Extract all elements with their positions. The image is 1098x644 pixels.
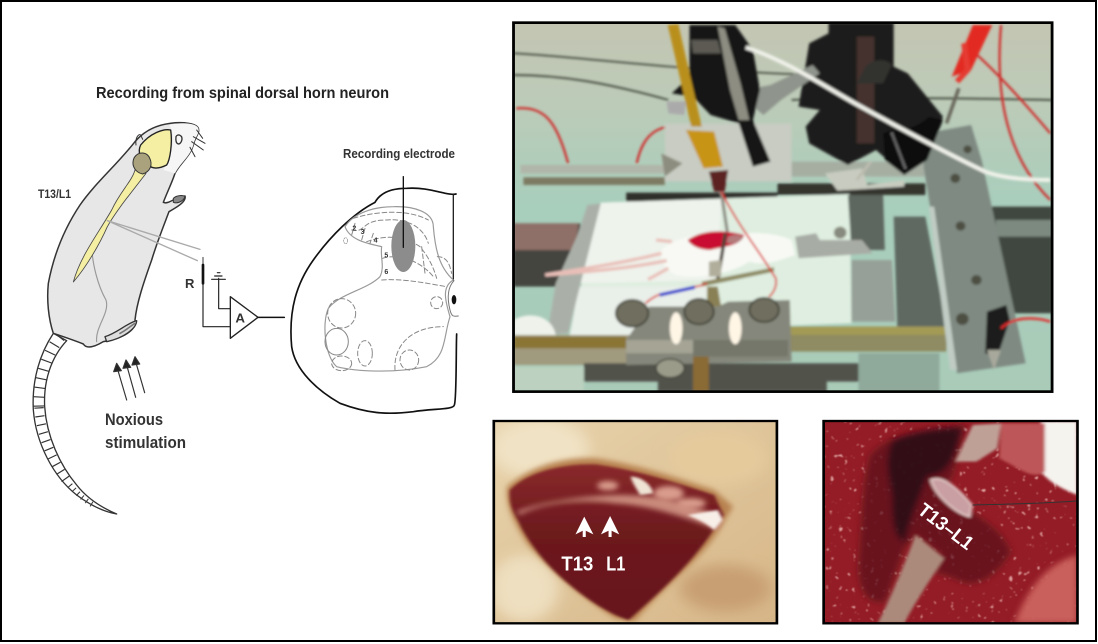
amplifier label: A bbox=[235, 311, 245, 326]
stimulation arrows bbox=[114, 357, 145, 400]
lamina numbers: 3 bbox=[361, 229, 365, 236]
hind leg line bbox=[92, 243, 107, 342]
muscle bbox=[824, 421, 1077, 623]
alligator clip bbox=[702, 267, 774, 287]
midline bbox=[451, 195, 455, 281]
recording site bbox=[391, 220, 415, 272]
white cable bbox=[746, 47, 1050, 180]
rig photo frame bbox=[514, 23, 1052, 392]
incision bbox=[688, 231, 744, 250]
rat head bbox=[163, 123, 199, 173]
panel: schematic of recording bbox=[33, 85, 458, 514]
electrode stem bbox=[718, 233, 725, 280]
rat feet and tail bbox=[545, 240, 672, 279]
clamp block bbox=[626, 300, 792, 365]
output line bbox=[258, 315, 284, 320]
panel: rig photo bbox=[514, 23, 1052, 392]
whiskers, ear, eye and paws bbox=[105, 130, 205, 342]
title: Recording from spinal dorsal horn neuron bbox=[96, 85, 389, 102]
bright tissue bbox=[631, 477, 653, 495]
wound bbox=[510, 464, 724, 620]
foil strips bbox=[547, 203, 601, 335]
label: R: R bbox=[185, 276, 195, 291]
light lower right bbox=[1014, 555, 1077, 623]
lower base bbox=[584, 363, 858, 392]
photo frame: incision bbox=[494, 421, 777, 623]
laminae dashed lines bbox=[325, 212, 452, 371]
photo scene bbox=[514, 23, 1052, 392]
lamina numbers: 5 bbox=[384, 252, 388, 259]
gold holder bbox=[686, 130, 723, 168]
electrode holder tip bbox=[709, 170, 728, 192]
rear rail bbox=[521, 165, 665, 173]
right dark mount area bbox=[894, 217, 946, 327]
left micromanipulator bbox=[672, 25, 770, 167]
left dark block bbox=[514, 223, 580, 287]
label: arrows to T13 and L1 bbox=[576, 516, 619, 537]
spinal cord bbox=[73, 170, 146, 282]
clamp plate bbox=[825, 168, 904, 191]
label: T13/L1: T13/L1 bbox=[38, 189, 72, 201]
amplifier wiring bbox=[203, 273, 230, 327]
lower screw bbox=[656, 359, 684, 378]
central canal bbox=[452, 295, 456, 304]
wall bbox=[514, 23, 1052, 392]
head clamp bbox=[795, 233, 873, 258]
stage wire bbox=[644, 190, 778, 306]
electrode bbox=[401, 177, 405, 247]
label: L1: L1 bbox=[606, 552, 625, 575]
dark manipulator right bbox=[799, 23, 943, 175]
white corner bbox=[1041, 421, 1077, 495]
gold rod bbox=[668, 24, 702, 127]
dark rear base bbox=[626, 193, 778, 202]
pale lower strip bbox=[878, 535, 944, 623]
fat speckles bbox=[824, 421, 1077, 623]
lamina numbers bbox=[352, 226, 388, 276]
label: T13-L1: T13–L1 bbox=[913, 499, 978, 555]
label: T13: T13 bbox=[561, 552, 593, 575]
label: noxious stimulation: stimulation bbox=[105, 433, 186, 452]
thread bbox=[973, 501, 1077, 505]
red cables bbox=[516, 25, 1050, 200]
red connectors bbox=[952, 25, 992, 77]
grey matter bbox=[325, 207, 453, 371]
label: noxious stimulation: Noxious bbox=[105, 410, 163, 429]
rat body bbox=[661, 233, 795, 277]
specular highlights bbox=[670, 312, 682, 344]
fur highlights bbox=[490, 418, 589, 478]
rat body bbox=[48, 123, 199, 347]
lamina numbers: 2 bbox=[352, 226, 356, 233]
cerebellum bbox=[133, 153, 151, 174]
rat tail bbox=[33, 333, 117, 514]
tendon band bbox=[517, 495, 723, 530]
panel: exposed spine photos bbox=[490, 418, 1077, 623]
bright glare lower left bbox=[514, 315, 556, 335]
thumb screws bbox=[616, 298, 779, 327]
electrode R bbox=[202, 257, 204, 283]
electrode leader lines bbox=[107, 221, 200, 261]
front rail bbox=[514, 335, 630, 365]
lamina numbers: 6 bbox=[384, 269, 388, 276]
wound rim bbox=[507, 458, 733, 622]
photo: laminectomy bbox=[824, 421, 1077, 623]
plate bolts bbox=[950, 145, 982, 325]
lamina numbers: 4 bbox=[374, 238, 378, 245]
spinal cord section outline bbox=[291, 188, 457, 413]
white paper sheet bbox=[570, 194, 851, 333]
brain bbox=[139, 130, 171, 168]
exposed cord bbox=[931, 479, 972, 517]
photo frame: laminectomy bbox=[824, 421, 1077, 623]
dark cavity bbox=[859, 425, 1011, 602]
right steel plate bbox=[924, 125, 1026, 373]
blue sleeve bbox=[660, 287, 695, 295]
photo: incision bbox=[490, 418, 777, 623]
right clip bbox=[985, 305, 1010, 357]
manipulator arm bbox=[749, 65, 820, 115]
label: recording electrode: Recording electrode bbox=[343, 147, 455, 161]
skin bbox=[494, 421, 777, 623]
amplifier bbox=[230, 297, 258, 338]
aluminium block bbox=[665, 123, 792, 182]
tissue flap top bbox=[956, 423, 1001, 462]
diagram: rat bbox=[33, 123, 458, 514]
midline notch bbox=[448, 281, 458, 316]
background cables bbox=[514, 53, 1052, 100]
